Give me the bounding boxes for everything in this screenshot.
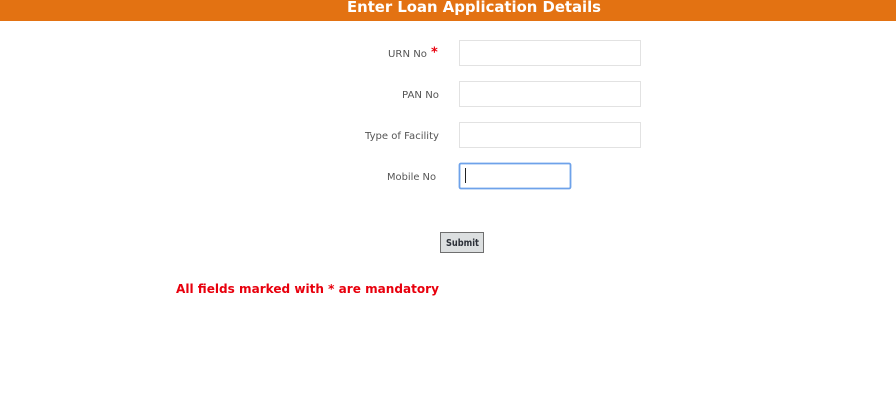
mandatory fields note: All fields marked with * are mandatory — [176, 281, 439, 296]
input: PAN No — [460, 82, 640, 106]
label: URN No — [388, 46, 438, 60]
label: Type of Facility: Type of Facility — [364, 131, 439, 142]
label: PAN No: PAN No — [402, 90, 439, 101]
submit button — [440, 232, 484, 252]
header bar with title — [0, 0, 896, 21]
input: Type of Facility — [460, 122, 640, 148]
input: Mobile No (focused, with cursor) — [460, 164, 570, 188]
form — [364, 40, 640, 252]
label: Mobile No: Mobile No — [387, 172, 436, 183]
label: URN No: URN No — [388, 49, 427, 60]
submit button: Submit — [446, 238, 479, 249]
label: URN No: * — [431, 46, 438, 60]
input: URN No — [460, 40, 640, 66]
